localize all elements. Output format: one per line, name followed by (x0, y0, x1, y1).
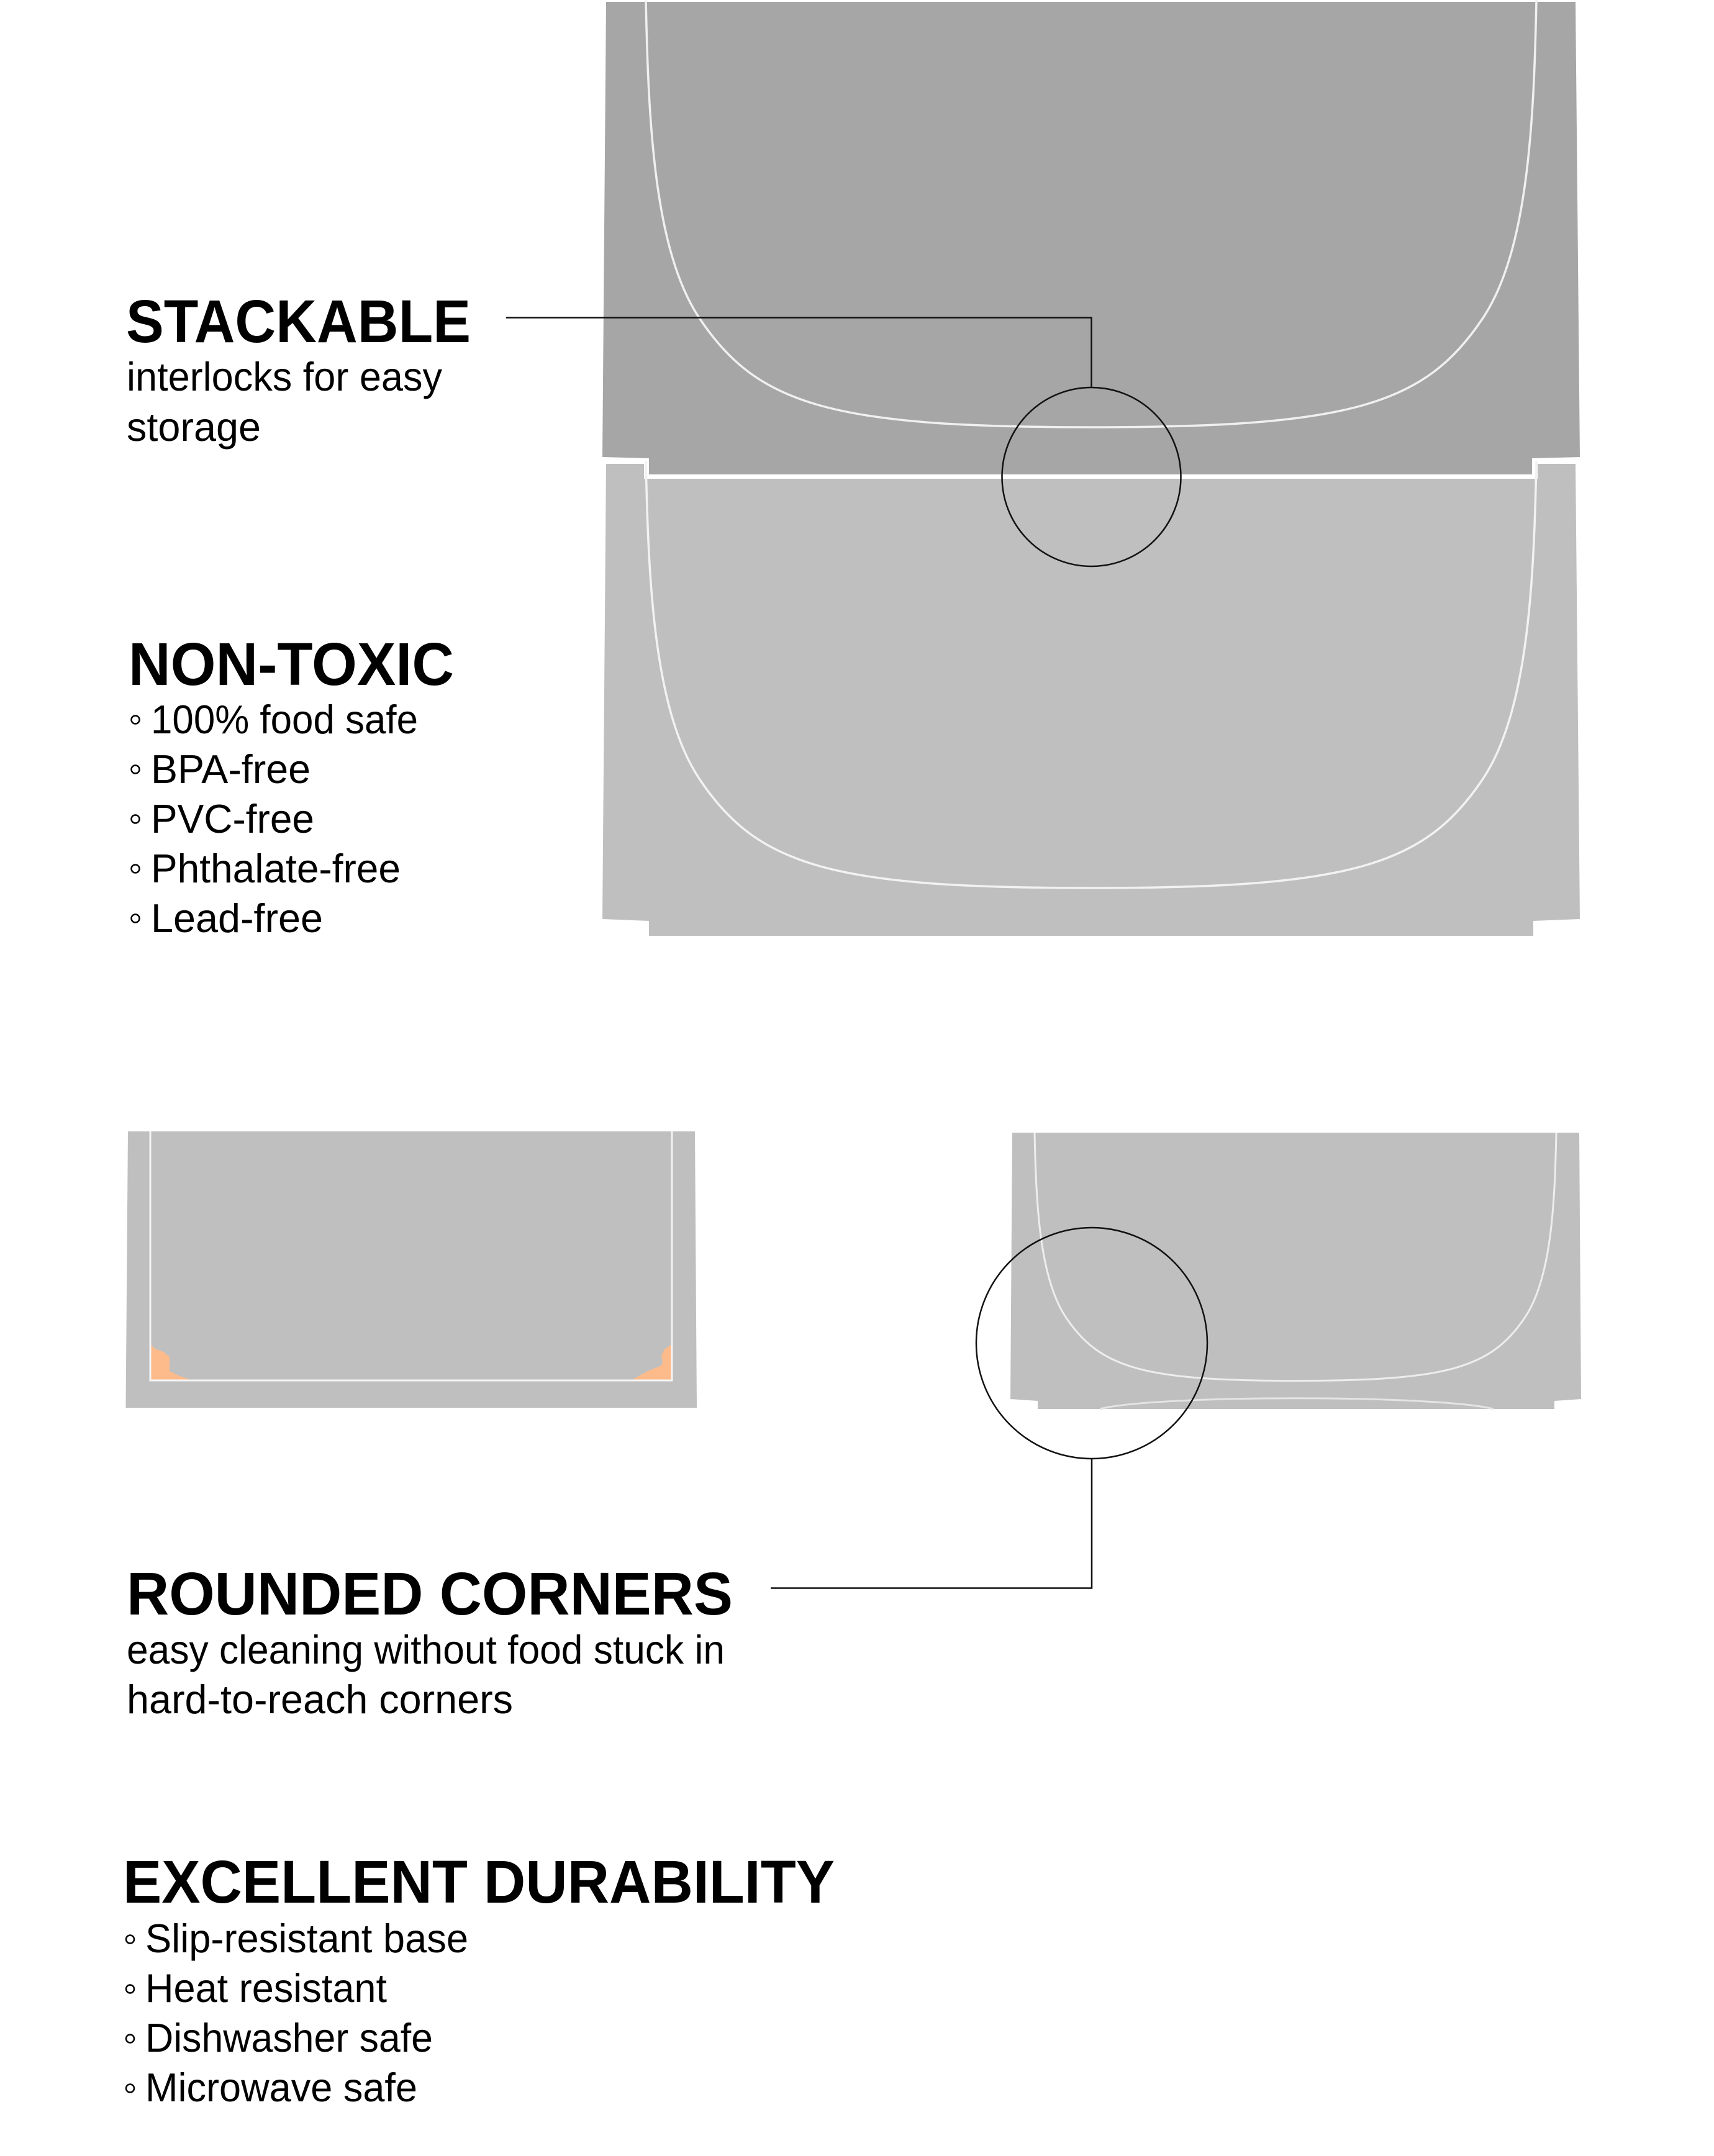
text block: rounded corners (127, 1560, 733, 1722)
upper container inner curve (646, 0, 1536, 427)
callout: stackable circle and leader line (506, 318, 1181, 566)
rounded container inner curve (1035, 1133, 1556, 1381)
text block: stackable: interlocks for easy (127, 354, 442, 399)
upper container body (602, 2, 1580, 474)
diagram: stacked containers cross-section (602, 0, 1580, 936)
text block: non-toxic: Phthalate-free (151, 846, 401, 891)
text block: stackable: STACKABLE (126, 288, 471, 355)
text block: non-toxic: 100% food safe (151, 697, 418, 742)
text block: stackable (126, 288, 471, 450)
food residue: right corner (631, 1344, 672, 1380)
text block: excellent durability: EXCELLENT DURABILITY (123, 1848, 835, 1916)
text block: excellent durability: Microwave safe (145, 2065, 417, 2110)
food residue: left corner (150, 1344, 193, 1380)
rounded container base arc (1100, 1398, 1494, 1409)
text block: excellent durability: Slip-resistant base (145, 1916, 468, 1961)
text block: stackable: storage (127, 404, 261, 450)
text block: non-toxic: BPA-free (151, 746, 311, 792)
text block: rounded corners: ROUNDED CORNERS (127, 1560, 733, 1628)
text block: non-toxic: Lead-free (151, 895, 323, 941)
text block: non-toxic: PVC-free (151, 796, 314, 841)
diagram: square-corner container with food residue (125, 1131, 697, 1408)
lower container inner curve (646, 461, 1536, 888)
text block: rounded corners: hard-to-reach corners (127, 1677, 513, 1722)
lower container body (602, 464, 1580, 936)
text block: excellent durability: Dishwasher safe (145, 2015, 433, 2060)
diagram: rounded-corner container (1010, 1133, 1581, 1409)
square container inner outline (150, 1131, 672, 1380)
rounded container body (1010, 1133, 1581, 1409)
text block: non-toxic (129, 630, 454, 941)
text block: excellent durability (123, 1848, 835, 2110)
callout: rounded corners circle and leader line (771, 1228, 1207, 1588)
text block: rounded corners: easy cleaning without food stuck in (127, 1627, 725, 1672)
text block: non-toxic: NON-TOXIC (129, 630, 454, 698)
square container body (125, 1131, 697, 1408)
text block: excellent durability: Heat resistant (145, 1965, 387, 2011)
